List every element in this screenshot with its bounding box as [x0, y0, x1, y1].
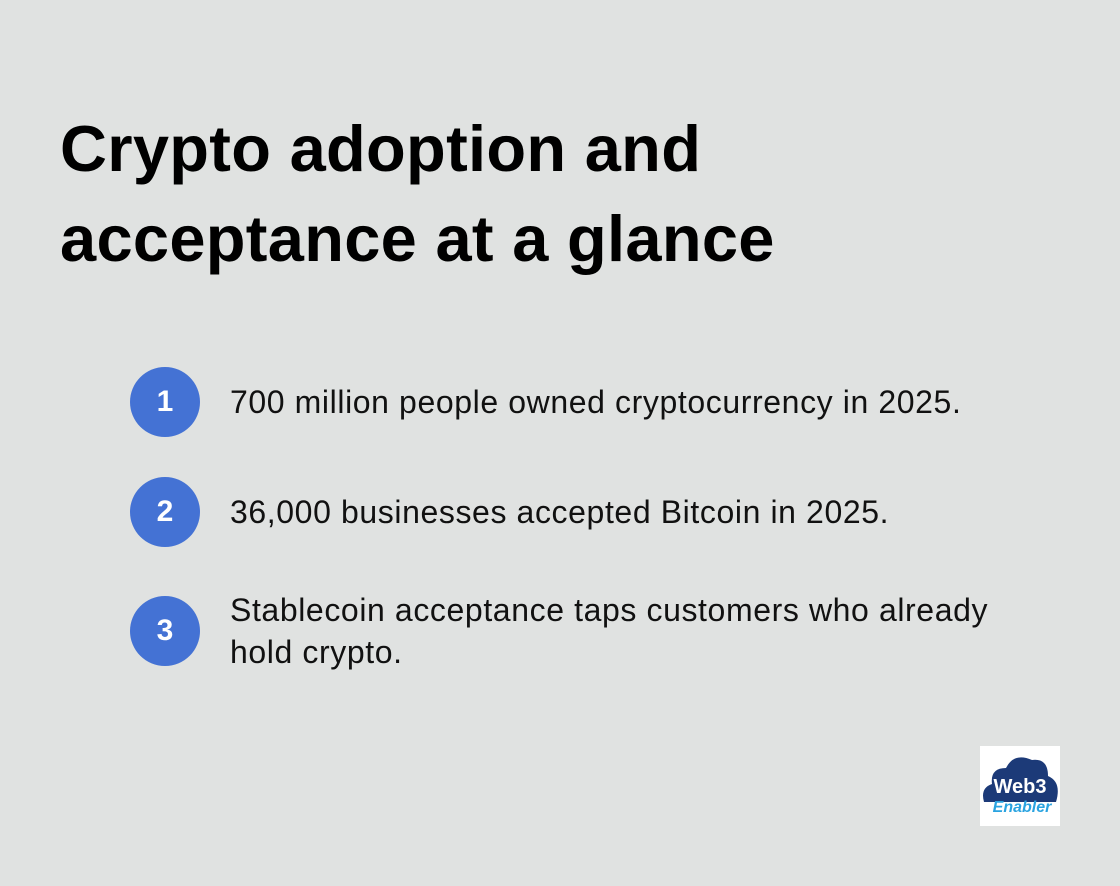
number 1: [130, 367, 200, 437]
logo: Enabler: [993, 799, 1052, 816]
number 2: [130, 477, 200, 547]
item 2: [130, 477, 889, 547]
text 2: 36,000 businesses accepted Bitcoin in 2025.: [230, 494, 889, 530]
text 1: 700 million people owned cryptocurrency in 2025.: [230, 384, 961, 420]
text 3: Stablecoin acceptance taps customers who already hold crypto.: [230, 592, 988, 670]
logo: Web3: [994, 776, 1046, 798]
number 3: 3: [157, 614, 173, 647]
number 2: 2: [157, 495, 173, 528]
title: Crypto adoption and: [60, 112, 701, 185]
logo: [980, 746, 1060, 826]
item 3: [130, 592, 988, 670]
number 3: [130, 596, 200, 666]
title: acceptance at a glance: [60, 202, 775, 275]
number 1: 1: [157, 385, 173, 418]
title: [60, 112, 775, 275]
item 1: [130, 367, 961, 437]
